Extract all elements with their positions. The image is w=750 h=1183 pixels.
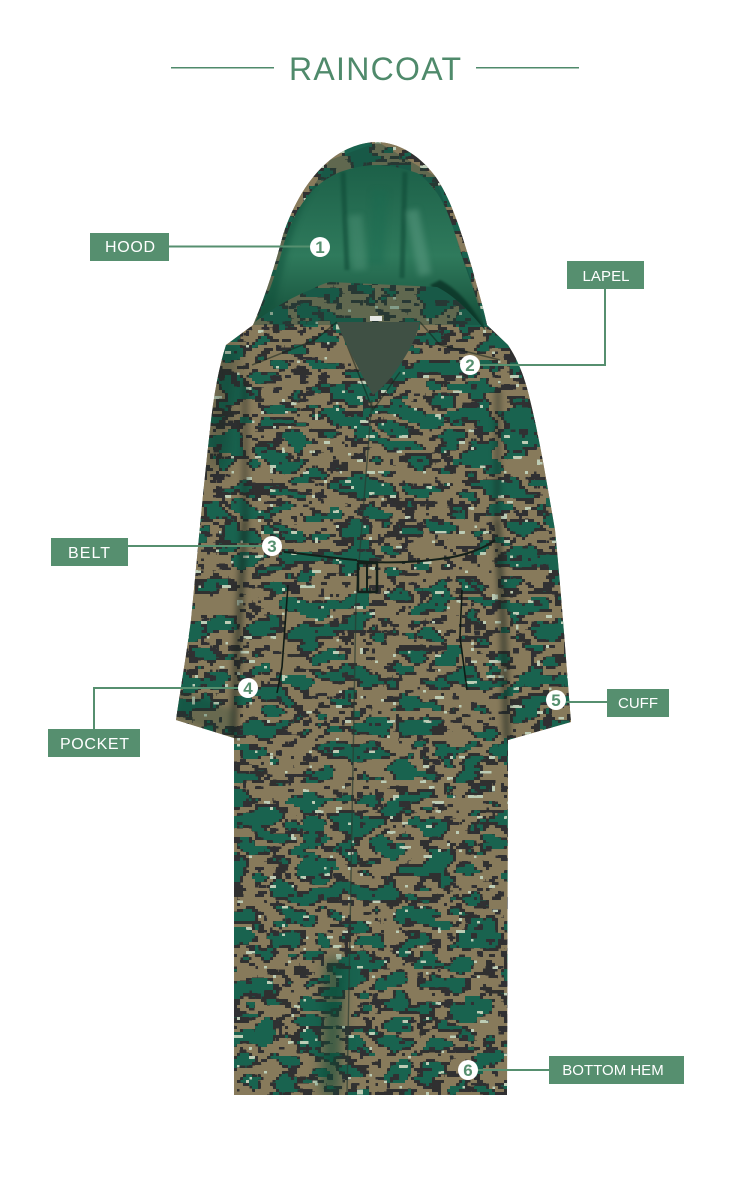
callout 5: cuff <box>546 689 669 717</box>
callout 5: cuff: CUFF <box>618 695 658 712</box>
callout 2: lapel <box>460 261 644 375</box>
callout 4: pocket: POCKET <box>60 736 129 753</box>
callout 3: belt: 3 <box>267 537 277 556</box>
hood lining <box>255 165 485 330</box>
callout 3: belt: BELT <box>68 545 110 562</box>
raincoat illustration <box>170 135 580 1105</box>
callout 1: hood: HOOD <box>105 239 155 256</box>
callout 5: cuff: 5 <box>551 691 561 710</box>
callout 6: bottom hem: 6 <box>463 1061 473 1080</box>
callout 3: belt <box>51 536 282 566</box>
collar fold lines <box>252 322 500 410</box>
callout 4: pocket: 4 <box>243 679 253 698</box>
hood rim tint <box>253 142 487 325</box>
center placket <box>347 400 372 1095</box>
inner lining and collar tag <box>337 316 420 395</box>
callout 2: lapel: 2 <box>465 356 475 375</box>
callout 2: lapel: LAPEL <box>582 268 630 285</box>
callout 6: bottom hem <box>458 1056 684 1084</box>
callout 4: pocket <box>48 678 258 757</box>
callout 1: hood <box>90 233 330 261</box>
folds and shading <box>233 520 245 740</box>
callout 6: bottom hem: BOTTOM HEM <box>562 1062 664 1079</box>
pockets <box>277 585 467 693</box>
callout 1: hood: 1 <box>315 238 325 257</box>
belt and buckle <box>284 540 495 592</box>
title: RAINCOAT: RAINCOAT <box>289 51 461 87</box>
